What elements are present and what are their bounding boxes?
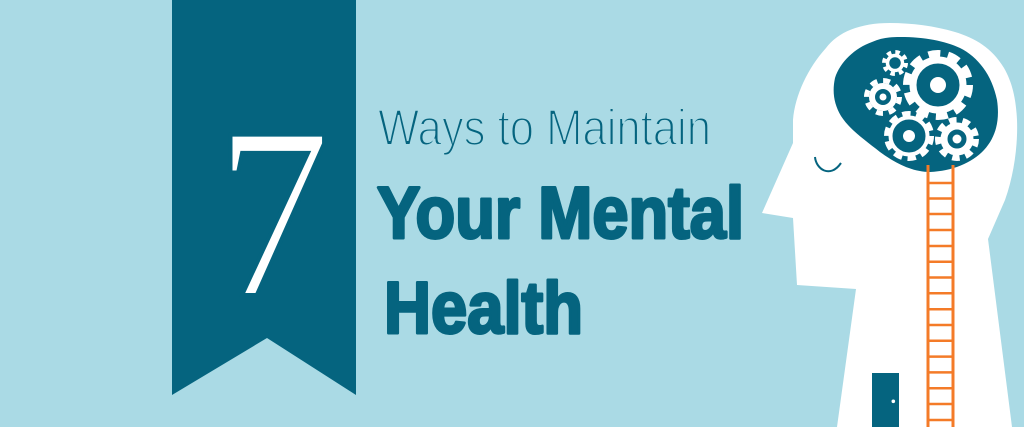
bookmark ribbon — [172, 0, 356, 395]
heading: health: Health — [384, 268, 583, 349]
right gear — [938, 120, 976, 158]
closed eye — [815, 157, 841, 171]
numeral 7: 7 — [215, 78, 331, 349]
small gear — [884, 52, 906, 74]
lower gear — [886, 114, 932, 158]
large gear — [906, 54, 970, 116]
heading: your mental: Your Mental — [377, 173, 744, 254]
heading: ways to maintain: Ways to Maintain — [378, 99, 711, 156]
brain — [834, 37, 998, 172]
head illustration — [762, 23, 1017, 427]
head silhouette — [762, 23, 1017, 427]
ladder — [928, 165, 953, 427]
left gear — [866, 80, 900, 114]
door — [872, 373, 899, 427]
